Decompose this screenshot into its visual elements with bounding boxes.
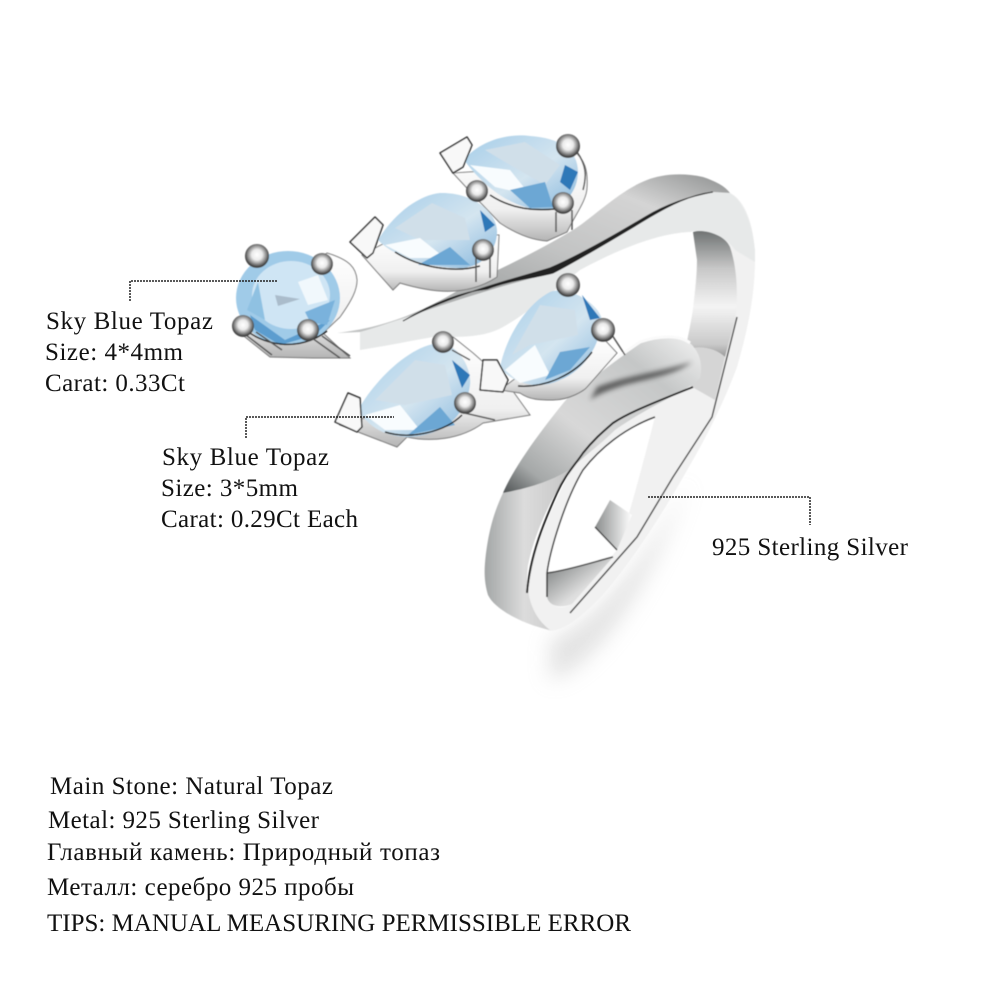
callout text: round stone: Size: 4*4mm: [45, 339, 184, 366]
gem tips: [335, 137, 508, 432]
callout text: round stone: Carat: 0.33Ct: [45, 370, 185, 397]
inside of band, lower: [547, 557, 613, 606]
prong stems: [246, 152, 625, 420]
band inner opening: [547, 417, 655, 607]
drop shadow: [550, 480, 690, 680]
inside of band, right: [685, 231, 737, 357]
specification text block: TIPS: MANUAL MEASURING PERMISSIBLE ERROR: [47, 910, 631, 937]
callout text: pear stones: [161, 444, 358, 533]
gem 2: [378, 193, 497, 269]
gem 4: [500, 291, 602, 386]
upper arm matte top: [337, 174, 730, 333]
prongs: [232, 134, 615, 414]
callout text: pear stones: Carat: 0.29Ct Each: [161, 506, 358, 533]
specification text block: Metal: 925 Sterling Silver: [48, 807, 320, 834]
callout text: round stone: Sky Blue Topaz: [46, 308, 213, 335]
callout text: silver: 925 Sterling Silver: [712, 534, 909, 561]
specification text block: Main Stone: Natural Topaz: [50, 773, 333, 800]
metal settings under gems: [240, 150, 617, 447]
ring illustration: [232, 134, 755, 680]
callout leader: silver band: [648, 497, 810, 525]
specification text block: Металл: серебро 925 пробы: [47, 874, 354, 901]
leaf shank lower: [485, 468, 572, 630]
callout leader: pear stones: [246, 417, 394, 438]
specification text block: [47, 773, 631, 937]
callout text: pear stones: Size: 3*5mm: [161, 475, 299, 502]
upper arm dark crease: [403, 192, 713, 321]
gem 3: [358, 343, 470, 437]
callout text: round stone: [45, 308, 213, 397]
leaf shank upper: [503, 337, 701, 493]
round gem: [236, 251, 340, 345]
callout leader: round stone: [130, 281, 277, 301]
gem 1: [464, 135, 578, 210]
callout text: pear stones: Sky Blue Topaz: [162, 444, 329, 471]
leaf fold shadow: [590, 362, 692, 400]
band front face: [527, 193, 755, 631]
upper arm face: [360, 192, 755, 350]
specification text block: Главный камень: Природный топаз: [47, 839, 440, 866]
